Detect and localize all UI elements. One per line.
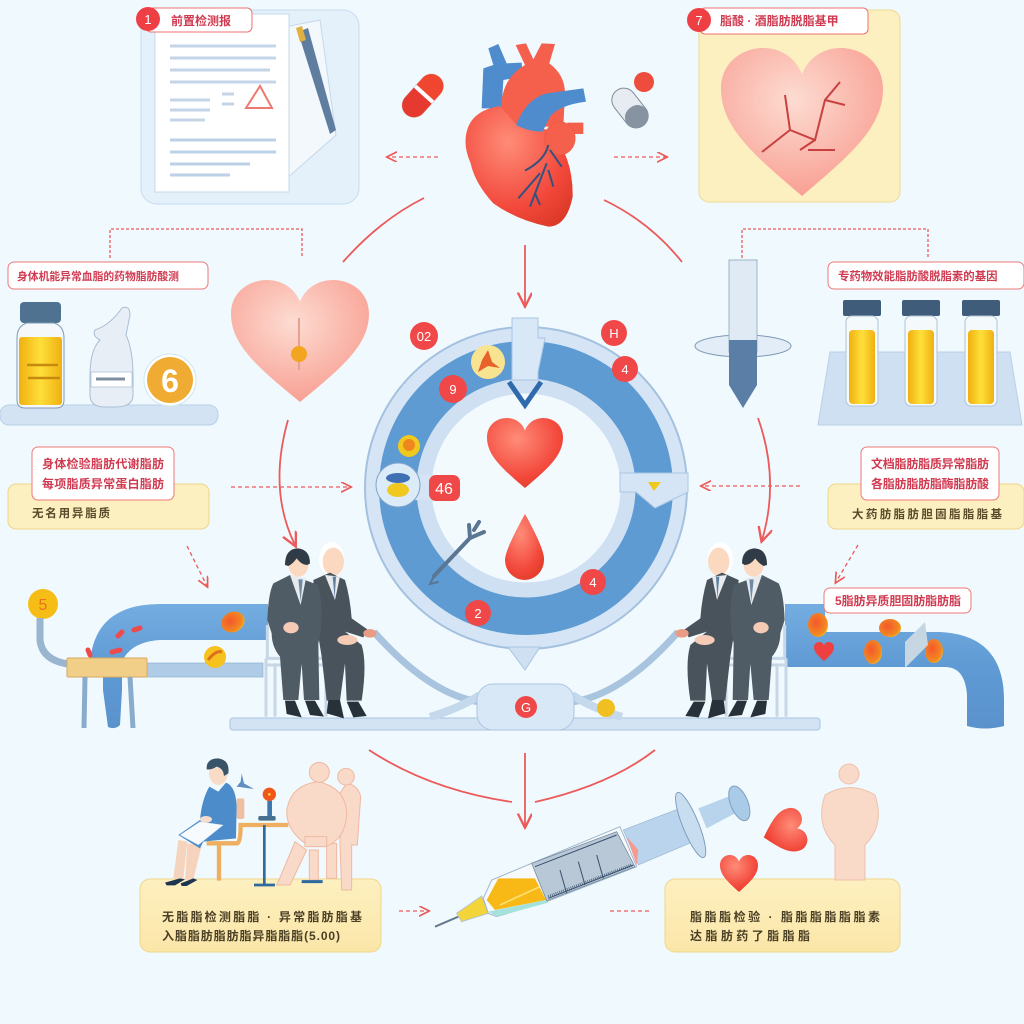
chair and table [207, 825, 288, 881]
hanging shade [237, 773, 254, 789]
coin [28, 589, 58, 619]
callout: left upper [8, 262, 208, 289]
panel: left shelf with vials [0, 302, 218, 425]
side capsule [376, 463, 420, 507]
icon: pink heart [721, 48, 883, 196]
thin tube [147, 663, 263, 677]
left connector tab [410, 475, 435, 500]
nurse [165, 758, 237, 886]
callout: left middle: 每项脂质异常蛋白脂肪 [42, 476, 164, 491]
icon: pink heart [231, 280, 369, 402]
red marks [88, 628, 140, 655]
icon: yellow vial [17, 302, 64, 408]
coin: 5 [39, 597, 48, 614]
icon: grey capsule and red ball [607, 72, 654, 133]
numbered badges [410, 320, 638, 626]
step label 1: 1 [144, 12, 152, 27]
icon: tube [962, 300, 1000, 406]
man front [267, 548, 324, 717]
centre valve badge [477, 684, 574, 730]
icon: heart [487, 418, 563, 488]
molecule [762, 82, 845, 152]
icon: pen [296, 26, 336, 134]
right pipe [785, 588, 1004, 728]
icon: red capsule [397, 69, 448, 122]
man behind [313, 542, 377, 718]
icon: heart tilted [758, 805, 810, 859]
bottom pointer [508, 647, 540, 670]
callout: right middle: 各脂肪脂肪脂酶脂肪酸 [871, 476, 989, 491]
icon: heart on bottom [720, 855, 758, 892]
panel: right shelf with tubes [818, 300, 1022, 425]
panel: bottom-right callout [665, 879, 900, 952]
callout: 5脂肪异质胆固肪脂肪脂 [835, 593, 961, 608]
numbered badges: 2 [474, 606, 482, 621]
icon: horizontal syringe [435, 783, 754, 927]
panel: document card [136, 7, 359, 204]
table [67, 658, 147, 728]
callout: right middle: 文档脂肪脂质异常脂肪 [871, 456, 989, 471]
pipeline base [230, 632, 820, 730]
icon: vertical syringe [695, 260, 791, 408]
badge 46: 46 [435, 481, 453, 498]
icon: white bottle [90, 307, 133, 407]
badge 46 [429, 475, 460, 501]
callout: right middle: 大药肪脂肪胆固脂脂脂基 [852, 507, 1002, 521]
panel: bottom-left callout with figures [140, 758, 381, 952]
icon: gold ball: 6 [161, 363, 179, 399]
icon: blood drop [505, 514, 544, 580]
panel: bottom-left callout with figures: 无脂脂检测脂脂 · 异常脂肪脂基 [162, 909, 362, 924]
chair [266, 625, 328, 717]
callout: left middle [8, 447, 209, 529]
numbered badges: 4 [589, 575, 597, 590]
callout [824, 588, 971, 613]
document page [155, 14, 289, 192]
document back sheet [270, 20, 336, 180]
panel: heart molecule card [687, 8, 900, 202]
icon: tube [843, 300, 881, 406]
icon: wrench [430, 522, 484, 584]
step label 7 [687, 8, 868, 34]
pink figures [277, 762, 361, 890]
centre valve badge: G [521, 700, 531, 715]
central ring diagram [365, 318, 688, 670]
icon: tube [902, 300, 940, 406]
arrows [110, 157, 928, 911]
panel: bottom-right callout: 脂脂脂检验 · 脂脂脂脂脂脂素 [690, 909, 880, 924]
callout: right middle [828, 447, 1024, 529]
icon: gold ball [144, 354, 196, 406]
callout: left upper: 身体机能异常血脂的药物脂肪酸测 [17, 269, 179, 283]
lamp [258, 788, 276, 821]
icon: anatomical heart [465, 43, 586, 227]
icon badge [471, 345, 505, 379]
panel: bottom-right callout: 达脂肪药了脂脂脂 [690, 928, 810, 943]
top valve [512, 318, 545, 380]
icon: pink figure [822, 764, 878, 880]
step label 1 [136, 7, 252, 32]
yellow pill [398, 435, 420, 457]
icon: warning triangle [246, 86, 272, 108]
left pipe [28, 589, 268, 728]
right connector tab [620, 473, 688, 508]
callout: right upper: 专药物效能脂肪酸脱脂素的基因 [838, 269, 997, 283]
step label 7: 脂酸 · 酒脂肪脱脂基甲 [720, 13, 839, 28]
people left [266, 542, 377, 718]
panel: bottom-left callout with figures: 入脂脂肪脂肪脂异脂脂脂(5.00) [162, 928, 340, 943]
numbered badges: H [609, 326, 619, 341]
callout: right upper [828, 262, 1024, 289]
step label 7: 7 [695, 13, 703, 28]
step label 1: 前置检测报 [171, 13, 231, 28]
numbered badges: 02 [417, 329, 431, 344]
callout: left middle: 身体检验脂肪代谢脂肪 [42, 456, 164, 471]
numbered badges: 4 [621, 362, 629, 377]
figures scene [165, 758, 361, 890]
callout: left middle: 无名用异脂质 [32, 506, 110, 520]
numbered badges: 9 [449, 382, 457, 397]
people right [675, 542, 786, 718]
